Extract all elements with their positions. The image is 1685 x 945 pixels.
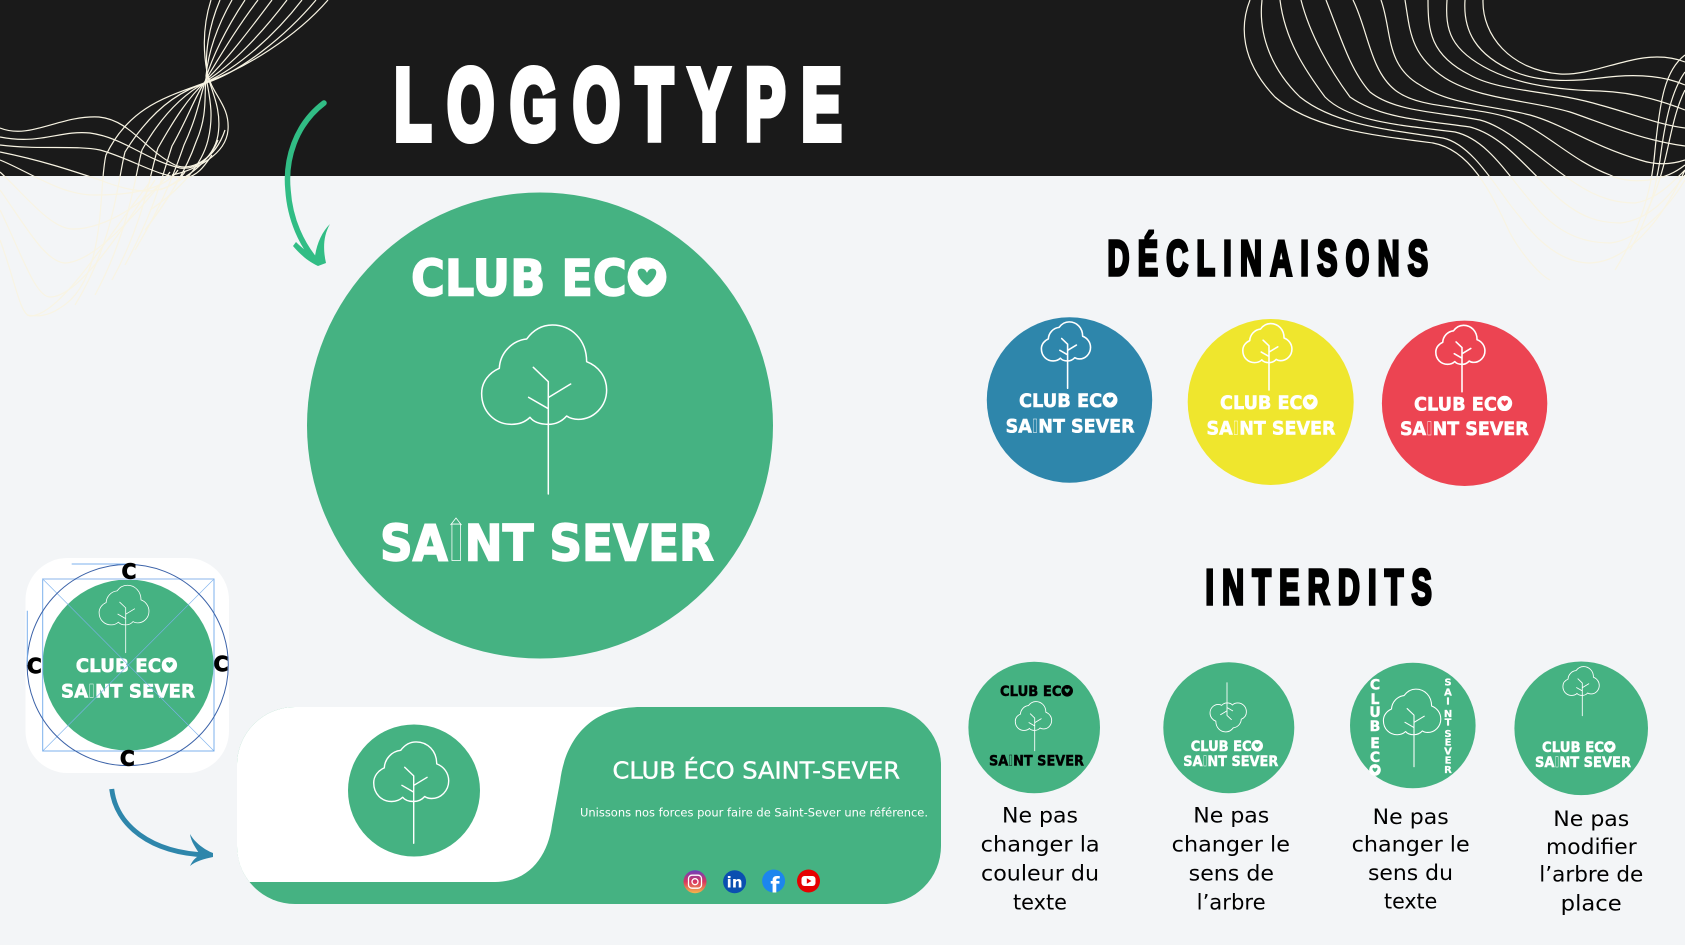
forbidden 2: inverted tree logo <box>1163 662 1294 793</box>
guide: margin letters: C <box>122 560 136 584</box>
main logo: saint sever: SAINT SEVER <box>380 514 714 572</box>
caption 3 <box>1352 805 1470 913</box>
icon: youtube <box>797 870 820 892</box>
variant: yellow logo <box>1188 319 1354 485</box>
caption 2: Ne pas <box>1193 804 1269 828</box>
caption 4: place <box>1561 892 1622 916</box>
guide: margin letters: C <box>214 652 228 676</box>
decorative waves: top right <box>1244 0 1685 280</box>
guide: margin letters <box>27 560 228 770</box>
banner <box>237 707 941 904</box>
caption 3: texte <box>1384 889 1437 913</box>
forbidden 2: inverted tree logo: SAINT SEVER <box>1183 754 1278 770</box>
icon: linkedin: in <box>727 874 743 892</box>
guide: green circle <box>42 580 214 750</box>
caption 1: texte <box>1013 890 1067 914</box>
main logo: heart in O <box>628 258 666 296</box>
heading: interdits: INTERDITS <box>1206 560 1432 615</box>
banner: name: CLUB ÉCO SAINT-SEVER <box>612 756 900 784</box>
caption 4: Ne pas <box>1553 807 1629 831</box>
variant: red logo: SAINT SEVER <box>1400 418 1529 440</box>
caption 4: l’arbre de <box>1539 863 1643 887</box>
forbidden 1: black text logo <box>968 662 1100 793</box>
banner: tree <box>374 742 449 843</box>
banner: white wave panel <box>237 707 640 882</box>
caption 2: sens de <box>1189 862 1274 886</box>
caption 4 <box>1539 807 1643 916</box>
caption 2: changer le <box>1172 833 1290 857</box>
caption 1: changer la <box>981 833 1100 857</box>
arrow: blue, guide to banner <box>112 789 213 866</box>
caption 2: l’arbre <box>1197 890 1266 914</box>
construction guide card <box>26 558 229 773</box>
heading: declinaisons: DÉCLINAISONS <box>1108 231 1428 286</box>
forbidden 4: tree moved logo <box>1514 662 1648 795</box>
icon: facebook <box>762 870 785 898</box>
icon: linkedin <box>723 870 746 893</box>
forbidden 4: tree moved logo: CLUB ECO <box>1542 740 1615 756</box>
guide: construction lines <box>27 564 228 766</box>
caption 3: changer le <box>1352 833 1470 857</box>
guide: heart in O <box>162 657 177 673</box>
banner: logo circle <box>348 724 480 856</box>
variant: blue logo: SAINT SEVER <box>1006 416 1135 438</box>
banner: slogan: Unissons nos forces pour faire de Saint-Sever une référence. <box>580 806 928 820</box>
icon: facebook: f <box>770 874 780 898</box>
guide: club eco: CLUB ECO <box>76 655 177 677</box>
variant: yellow logo: SAINT SEVER <box>1206 417 1336 439</box>
caption 2 <box>1172 804 1290 914</box>
main logo: tower spire <box>450 518 462 525</box>
forbidden 3: vertical text logo: SAINT SEVER <box>1444 678 1452 776</box>
caption 4: modifier <box>1546 835 1637 859</box>
forbidden 1: black text logo: SAINT SEVER <box>989 754 1084 770</box>
guide: margin letters: C <box>27 654 42 678</box>
header band <box>0 0 1685 176</box>
main logo: club eco: CLUB ECO <box>411 250 666 308</box>
variant: yellow logo: CLUB ECO <box>1220 392 1318 414</box>
icon: instagram <box>684 870 706 893</box>
forbidden 4: tree moved logo: SAINT SEVER <box>1535 755 1631 771</box>
guide: margin letters: C <box>120 746 135 770</box>
variant: blue logo: CLUB ECO <box>1019 390 1117 412</box>
main logo <box>307 192 773 658</box>
decorative waves: top left <box>0 0 328 316</box>
guide: saint sever: SAINT SEVER <box>61 681 195 703</box>
variant: red logo: CLUB ECO <box>1414 393 1512 415</box>
caption 1 <box>981 804 1100 914</box>
guide: tree <box>99 585 149 653</box>
caption 1: Ne pas <box>1002 804 1078 828</box>
caption 1: couleur du <box>981 862 1099 886</box>
forbidden 1: black text logo: CLUB ECO <box>1000 684 1073 700</box>
variant: blue logo <box>987 317 1152 483</box>
variant: red logo <box>1382 321 1547 486</box>
caption 3: Ne pas <box>1373 805 1449 829</box>
caption 3: sens du <box>1368 861 1453 885</box>
forbidden 3: vertical text logo: CLUB ECO <box>1369 678 1381 779</box>
forbidden 2: inverted tree logo: CLUB ECO <box>1191 739 1263 755</box>
title: LOGOTYPE <box>394 49 842 161</box>
arrow: green, title to main logo <box>287 103 330 266</box>
main logo: tree <box>482 325 607 494</box>
forbidden 3: vertical text logo <box>1350 663 1476 788</box>
